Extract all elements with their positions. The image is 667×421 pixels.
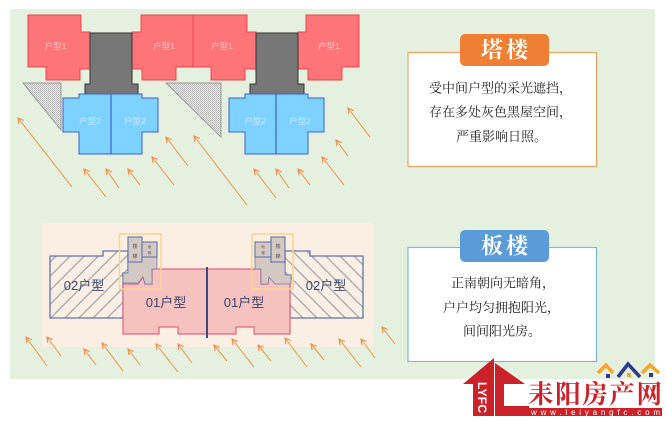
unit: 01 left pink: 01户型: [146, 295, 186, 310]
tab: slab heading: 板楼: [481, 234, 531, 258]
arrows: sunlight on tower buildings: [18, 108, 370, 205]
unit: tower 2 red right: 户型1: [318, 41, 340, 51]
description text: 严重影响日照。: [456, 129, 547, 144]
diagram: tower building floor plans: [23, 15, 359, 154]
unit: 01 left pink: [123, 269, 207, 334]
core: left stair and elevator: 电: [148, 244, 152, 249]
core: right stair and elevator: 电: [261, 244, 265, 249]
diagram: slab building floor plan: [42, 223, 374, 347]
units: tower 1 blue: 户型2: [79, 116, 101, 126]
unit: tower 1 red right: [132, 15, 194, 80]
arrows: sunlight on slab building: [26, 327, 395, 372]
unit: 02 left hatched: 02户型: [64, 278, 104, 293]
unit: tower 1 red right: 户型1: [153, 41, 175, 51]
panel: slab description: [408, 230, 596, 362]
unit: 01 right pink: [207, 269, 290, 334]
core: left stair and elevator: 楼: [132, 243, 138, 250]
unit: 02 left hatched: [50, 251, 128, 318]
logo roof icons: [598, 364, 659, 378]
description text: 正南朝向无暗角，: [451, 276, 555, 292]
logo: Leiyang real estate: [463, 358, 662, 417]
logo vertical letters: LYFC: [475, 382, 489, 413]
units: tower 2 blue: 户型2: [289, 116, 311, 126]
core: tower 2 gray: [250, 33, 304, 94]
description text: [443, 276, 560, 338]
highlight box left: [120, 234, 161, 289]
unit: tower 1 red left: 户型1: [45, 41, 67, 51]
core: left stair and elevator: 梯: [132, 253, 138, 260]
center divider: [206, 267, 208, 338]
unit: tower 2 red left: 户型1: [211, 41, 233, 51]
unit: tower 1 red left: [28, 15, 90, 80]
tab: slab heading: [460, 230, 549, 262]
unit: tower 2 red right: [298, 15, 359, 80]
logo arrow right part: [495, 363, 529, 416]
panel: tower description: [408, 34, 596, 166]
shadow triangle middle: [166, 83, 221, 137]
description text: 存在多处灰色黑屋空间，: [429, 104, 572, 120]
highlight box right: [252, 234, 293, 289]
units: tower 1 blue: 户型2: [124, 116, 146, 126]
core: right stair and elevator: 梯: [275, 253, 281, 260]
cream backdrop: [42, 223, 374, 347]
logo chinese name: 耒阳房产网: [528, 380, 662, 409]
unit: 01 right pink: 01户型: [224, 295, 264, 310]
core: right stair and elevator: 梯: [261, 250, 265, 255]
core: right stair and elevator: 楼: [275, 243, 281, 250]
unit: 02 right hatched: [285, 251, 363, 318]
unit: 02 right hatched: 02户型: [306, 278, 346, 293]
core: left stair and elevator: 梯: [148, 250, 152, 255]
text box: [408, 52, 596, 166]
units: tower 2 blue: 户型2: [244, 116, 266, 126]
description text: 间间阳光房。: [463, 324, 541, 338]
shadow triangle left: [23, 83, 61, 130]
unit: tower 2 red left: [193, 15, 256, 80]
description text: [429, 80, 572, 144]
core: left stair and elevator: [123, 237, 157, 284]
core: tower 1 gray: [85, 33, 138, 94]
tab: tower heading: 塔楼: [481, 38, 531, 62]
text box: [408, 248, 596, 362]
description text: 户户均匀拥抱阳光，: [443, 300, 560, 316]
logo url bar: www.leiyangfc.com: [530, 408, 660, 417]
logo arrow house: [463, 358, 494, 416]
description text: 受中间户型的采光遮挡，: [429, 80, 572, 96]
tab: tower heading: [460, 34, 549, 66]
units: tower 1 blue: [63, 94, 158, 154]
core: right stair and elevator: [255, 237, 291, 284]
units: tower 2 blue: [229, 94, 324, 154]
